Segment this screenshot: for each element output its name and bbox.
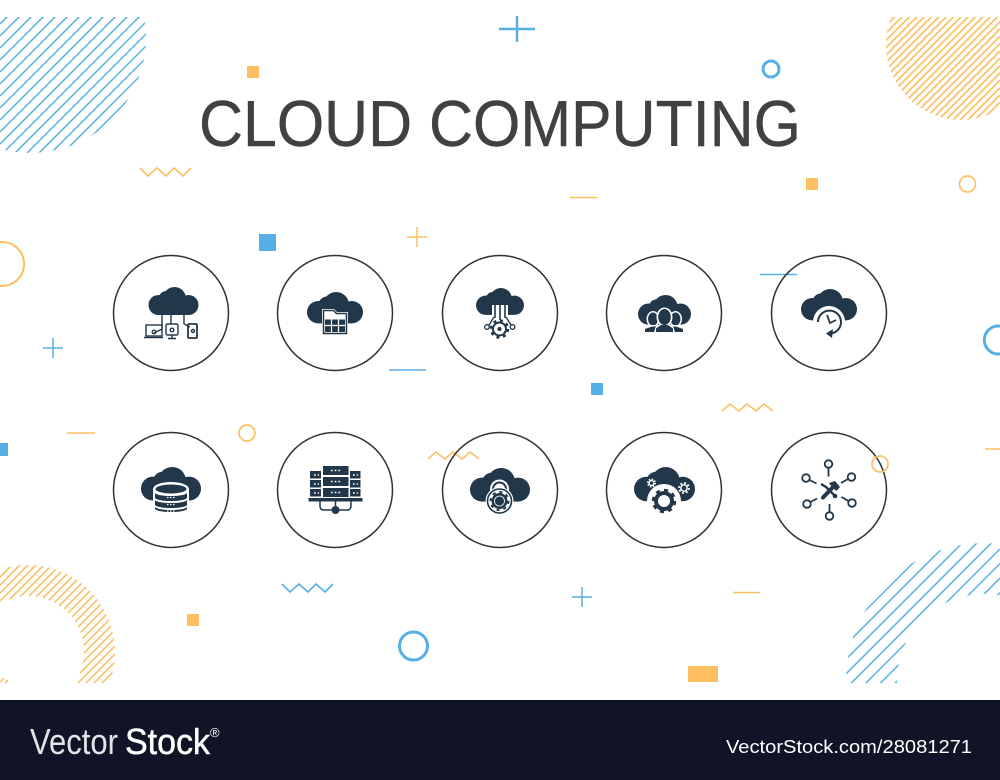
hatched circle top right <box>886 17 1000 120</box>
orange circle overlapping last icon <box>872 456 888 472</box>
footer registered mark: ® <box>210 725 220 740</box>
icon: cloud circuit gear <box>442 256 558 370</box>
icon: cloud settings gears <box>606 432 722 548</box>
icon: server network <box>278 432 392 548</box>
hatched ring bottom left <box>0 565 115 683</box>
footer logo: Vector <box>30 721 118 762</box>
icon: cloud folder <box>278 256 392 370</box>
icon: cloud connected devices <box>114 256 228 370</box>
icon: cloud backup clock <box>772 256 886 370</box>
hatched ring bottom right <box>846 543 1000 683</box>
icon: tools network hub <box>772 432 886 548</box>
hatch remnant bottom left corner <box>0 678 8 683</box>
footer image id: VectorStock.com/28081271 <box>726 737 972 757</box>
title: CLOUD COMPUTING <box>199 87 801 160</box>
icon: cloud lock gear <box>442 432 558 548</box>
footer bar <box>0 700 1000 780</box>
icon: cloud database <box>114 432 228 548</box>
hatched circle top left <box>0 17 146 153</box>
icon: cloud users <box>606 256 722 370</box>
footer logo bold: Stock <box>125 721 211 762</box>
